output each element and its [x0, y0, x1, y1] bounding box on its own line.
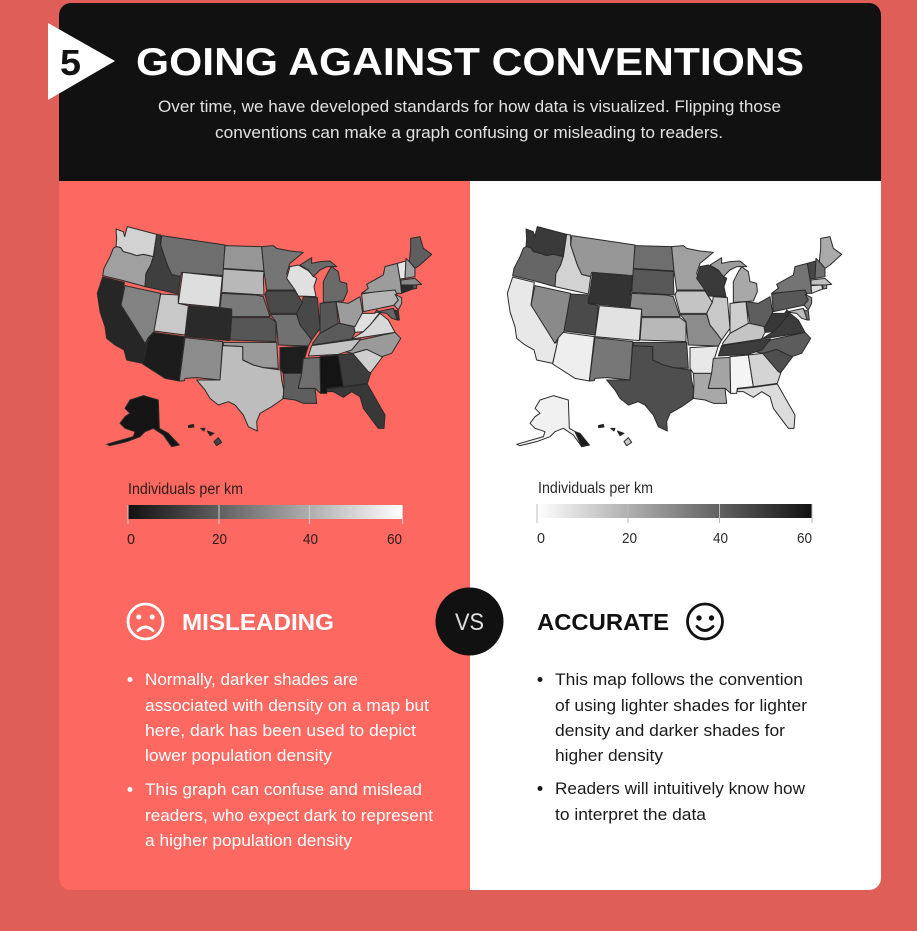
panel: misleading — [59, 175, 470, 890]
text block: misleading bullets: This graph can confuse and mislead — [145, 781, 422, 799]
text block: accurate bullets: of using lighter shades for lighter — [555, 697, 808, 715]
map: misleading choropleth — [97, 227, 432, 447]
legend: misleading: 40 — [303, 531, 318, 548]
text block: misleading bullets — [128, 671, 433, 850]
text block: accurate bullets: higher density — [555, 747, 664, 765]
legend: accurate: Individuals per km — [538, 480, 653, 497]
section number marker: 5 — [60, 42, 81, 83]
text block: misleading bullets: a higher population density — [145, 832, 353, 850]
legend: accurate: 40 — [713, 530, 728, 547]
text block: misleading bullets: Normally, darker shades are — [145, 671, 358, 689]
legend: misleading — [127, 481, 403, 548]
text block: accurate bullets: Readers will intuitively know how — [555, 780, 805, 798]
text block: misleading bullets: associated with density on a map but — [145, 697, 429, 715]
legend: misleading: 60 — [387, 531, 402, 548]
header description: conventions can make a graph confusing or misleading to readers. — [215, 124, 723, 142]
legend: accurate — [537, 480, 812, 547]
legend: misleading: Individuals per km — [128, 481, 243, 498]
icon: happy face — [688, 604, 722, 639]
heading: misleading: MISLEADING — [182, 609, 334, 635]
text block: accurate bullets: density and darker shades for — [555, 722, 786, 740]
text block: accurate bullets: to interpret the data — [555, 806, 707, 824]
text block: accurate bullets — [538, 671, 808, 824]
header description — [158, 98, 781, 142]
heading: accurate: ACCURATE — [537, 609, 669, 635]
section number marker — [48, 23, 115, 100]
text block: accurate bullets: This map follows the convention — [555, 671, 803, 689]
legend: accurate: 0 — [537, 530, 545, 547]
legend: misleading: 0 — [127, 531, 135, 548]
header description: Over time, we have developed standards for how data is visualized. Flipping those — [158, 98, 781, 116]
text block: misleading bullets: readers, who expect dark to represent — [145, 807, 433, 825]
legend: misleading: 20 — [212, 531, 227, 548]
text block: misleading bullets: lower population density — [145, 747, 333, 765]
title: GOING AGAINST CONVENTIONS — [136, 41, 804, 84]
legend: accurate: 60 — [797, 530, 812, 547]
header band — [48, 3, 881, 181]
legend: accurate: 20 — [622, 530, 637, 547]
vs badge: VS — [455, 609, 484, 636]
vs badge — [436, 588, 504, 656]
text block: misleading bullets: here, dark has been used to depict — [145, 722, 416, 740]
icon: sad face — [128, 604, 163, 639]
panel: accurate — [470, 175, 881, 890]
map: accurate choropleth — [507, 227, 842, 447]
